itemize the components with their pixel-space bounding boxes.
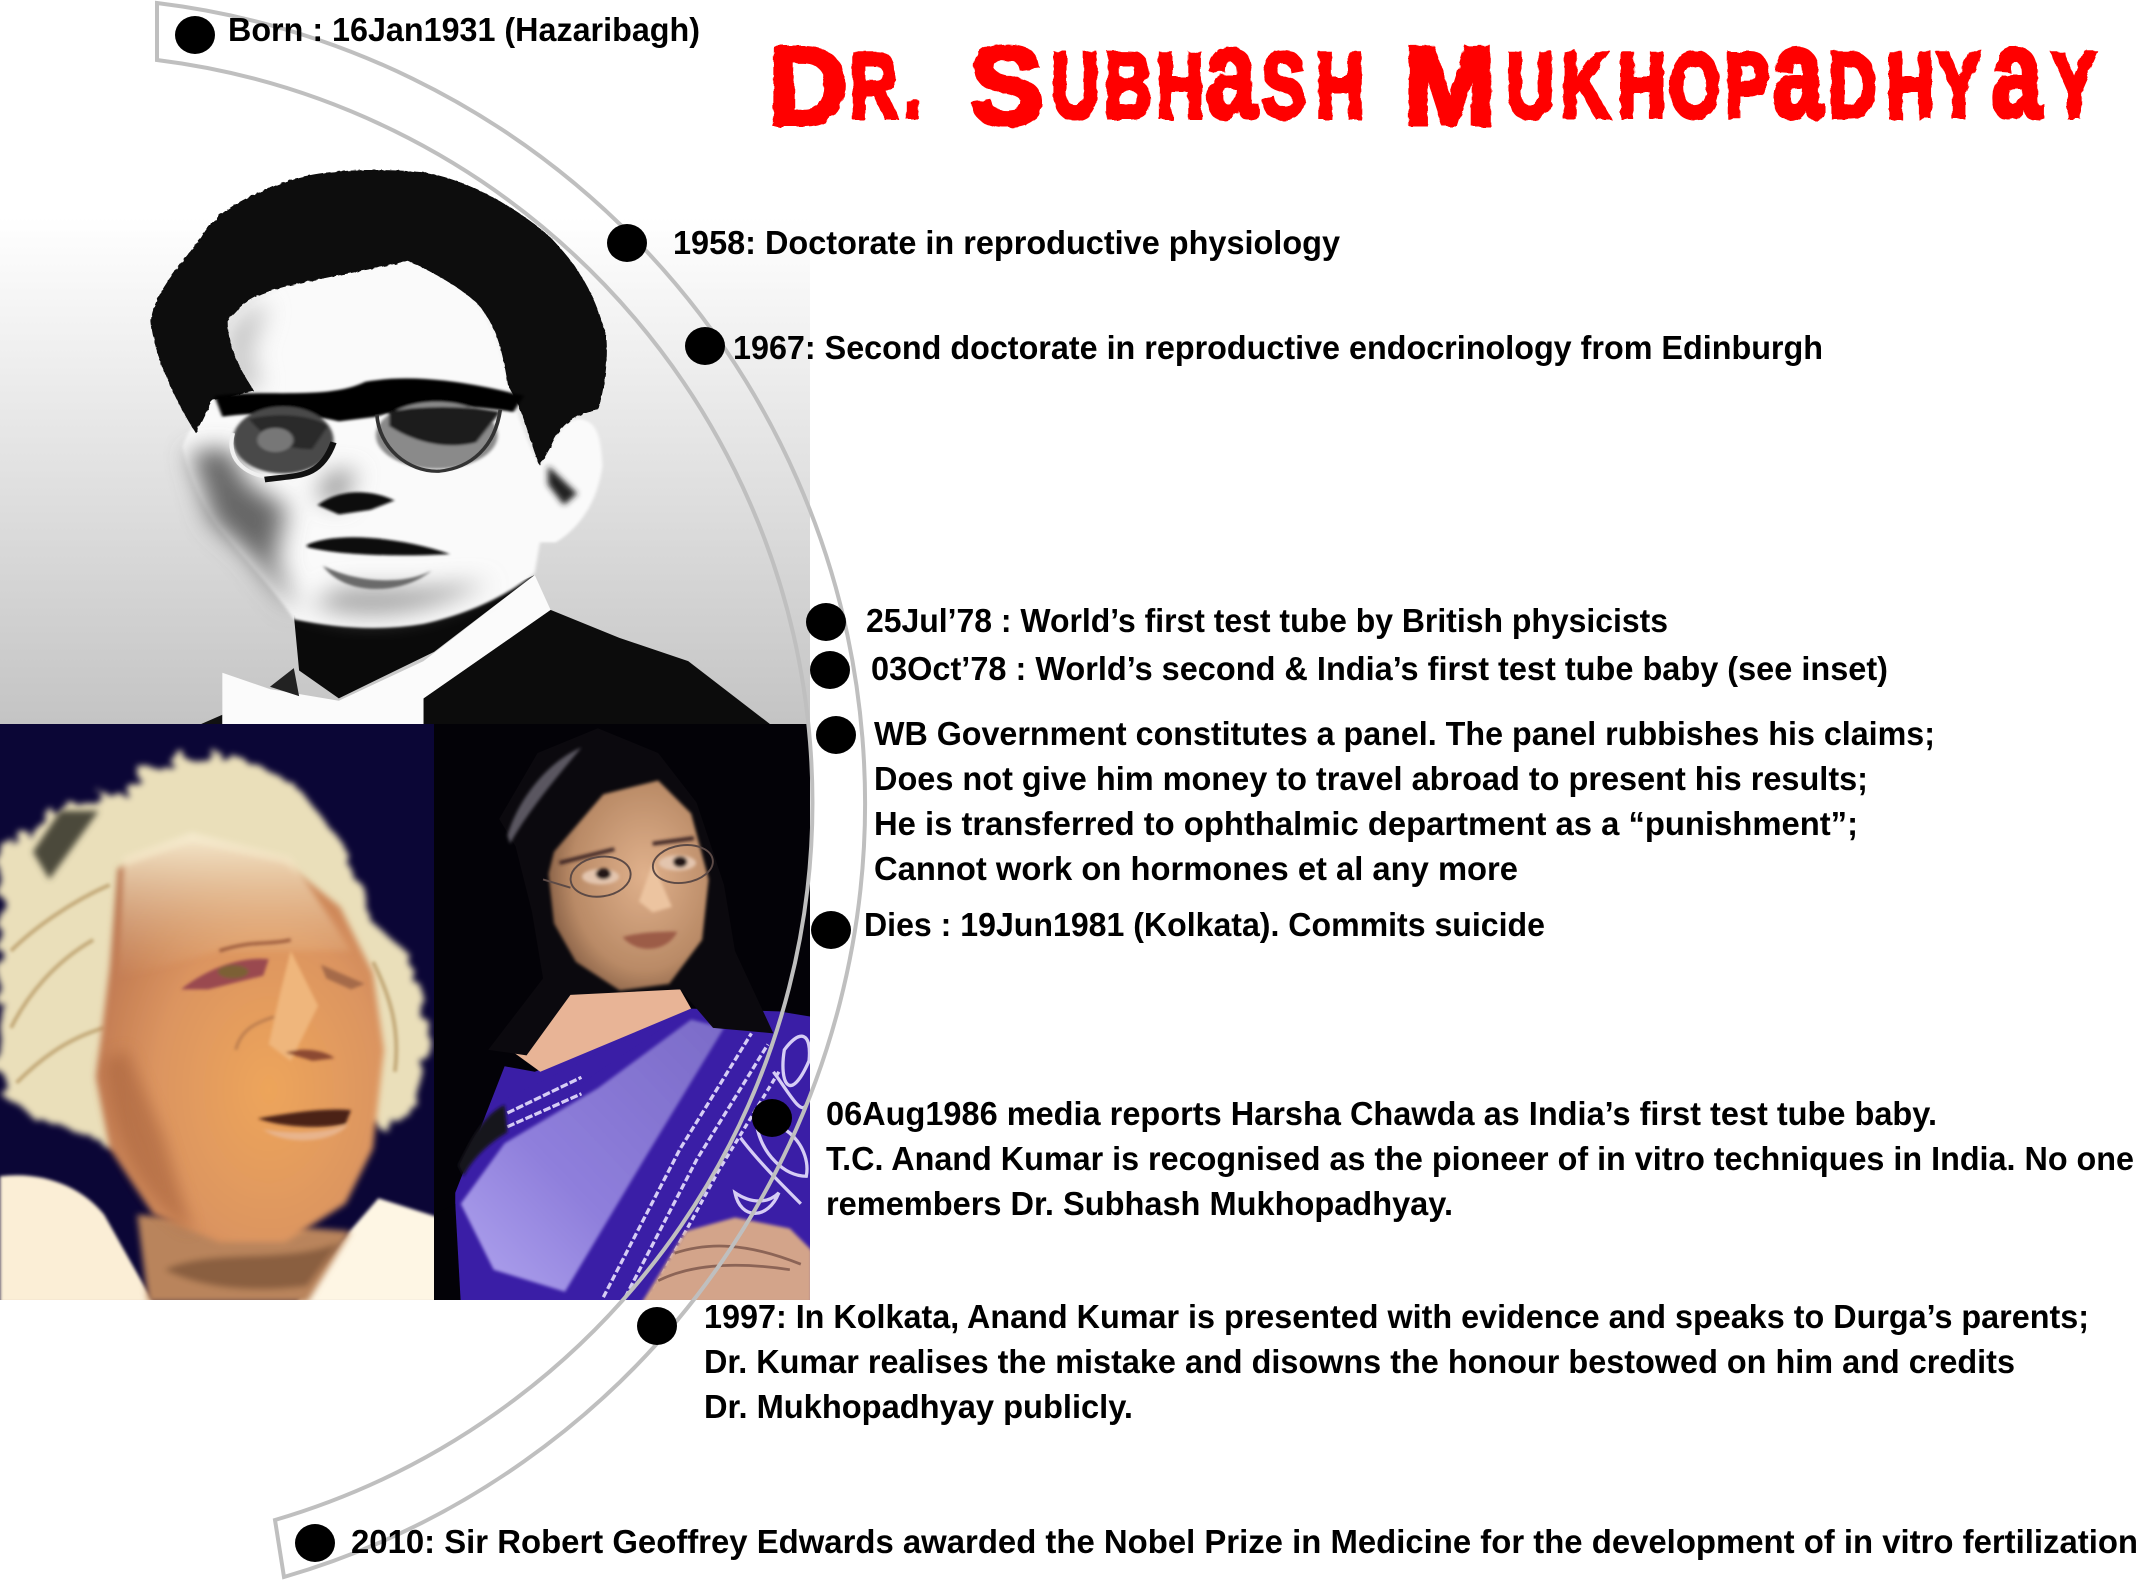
title: H (1156, 33, 1204, 137)
event: 1986 media reports: T.C. Anand Kumar is recognised as the pioneer of in vitro techniques in India. No one (826, 1140, 2134, 1177)
title: H (1886, 33, 1934, 137)
title: a (1992, 5, 2043, 145)
title: P (1725, 33, 1769, 137)
event: 2010 Nobel Prize: 2010: Sir Robert Geoffrey Edwards awarded the Nobel Prize in Medicine for the development of in vitro fertilization (351, 1523, 2138, 1560)
event: 3 October 1978: 03Oct’78 : World’s second & India’s first test tube baby (see inset) (871, 650, 1888, 687)
event: 1986 media reports: 06Aug1986 media reports Harsha Chawda as India’s first test tube baby. (826, 1095, 1937, 1132)
event: 1997 Anand Kumar: 1997: In Kolkata, Anand Kumar is presented with evidence and speaks to Durga’s parents; (704, 1298, 2089, 1335)
timeline arc band (157, 3, 865, 1577)
photo: portrait of Dr. Mukhopadhyay (0, 170, 810, 724)
event: 1986 media reports: remembers Dr. Subhash Mukhopadhyay. (826, 1185, 1453, 1222)
event: WB government panel: Does not give him money to travel abroad to present his results; (874, 760, 1868, 797)
event: born: Born : 16Jan1931 (Hazaribagh) (228, 11, 700, 48)
event: 1997 Anand Kumar: Dr. Kumar realises the mistake and disowns the honour bestowed on him and credits (704, 1343, 2015, 1380)
event: WB government panel: WB Government constitutes a panel. The panel rubbishes his claims; (874, 715, 1935, 752)
photo: elderly man (0, 724, 439, 1303)
event: death: Dies : 19Jun1981 (Kolkata). Commits suicide (864, 906, 1545, 943)
event: 25 July 1978: 25Jul’78 : World’s first test tube by British physicists (866, 602, 1668, 639)
title: Y (1937, 33, 1981, 137)
event: 1997 Anand Kumar: Dr. Mukhopadhyay publicly. (704, 1388, 1133, 1425)
title: B (1104, 33, 1152, 137)
title: R (850, 33, 897, 137)
title: H (1618, 33, 1666, 137)
hair (151, 170, 607, 466)
title: S (970, 25, 1043, 148)
title: K (1561, 33, 1609, 137)
title: S (1261, 33, 1306, 137)
event: 1986 media reports (752, 1095, 2134, 1222)
title: O (1669, 33, 1720, 137)
title: U (1506, 33, 1554, 137)
title: U (1051, 33, 1099, 137)
event: WB government panel: He is transferred to ophthalmic department as a “punishment”; (874, 805, 1858, 842)
title: D (1829, 33, 1877, 137)
event: 1958 doctorate: 1958: Doctorate in reproductive physiology (673, 224, 1341, 261)
title: . (904, 33, 922, 137)
event: 1997 Anand Kumar (637, 1298, 2089, 1425)
title (768, 5, 2096, 148)
event: WB government panel (816, 715, 1935, 887)
title: a (1206, 5, 1257, 145)
title: M (1404, 25, 1496, 148)
title: D (768, 25, 847, 148)
event: 1967 second doctorate: 1967: Second doctorate in reproductive endocrinology from Edinburgh (733, 329, 1823, 366)
title: H (1316, 33, 1364, 137)
photo: Dr. Durga (test tube baby) (433, 724, 812, 1303)
title: a (1773, 5, 1824, 145)
event: WB government panel: Cannot work on hormones et al any more (874, 850, 1518, 887)
title: Y (2052, 33, 2096, 137)
